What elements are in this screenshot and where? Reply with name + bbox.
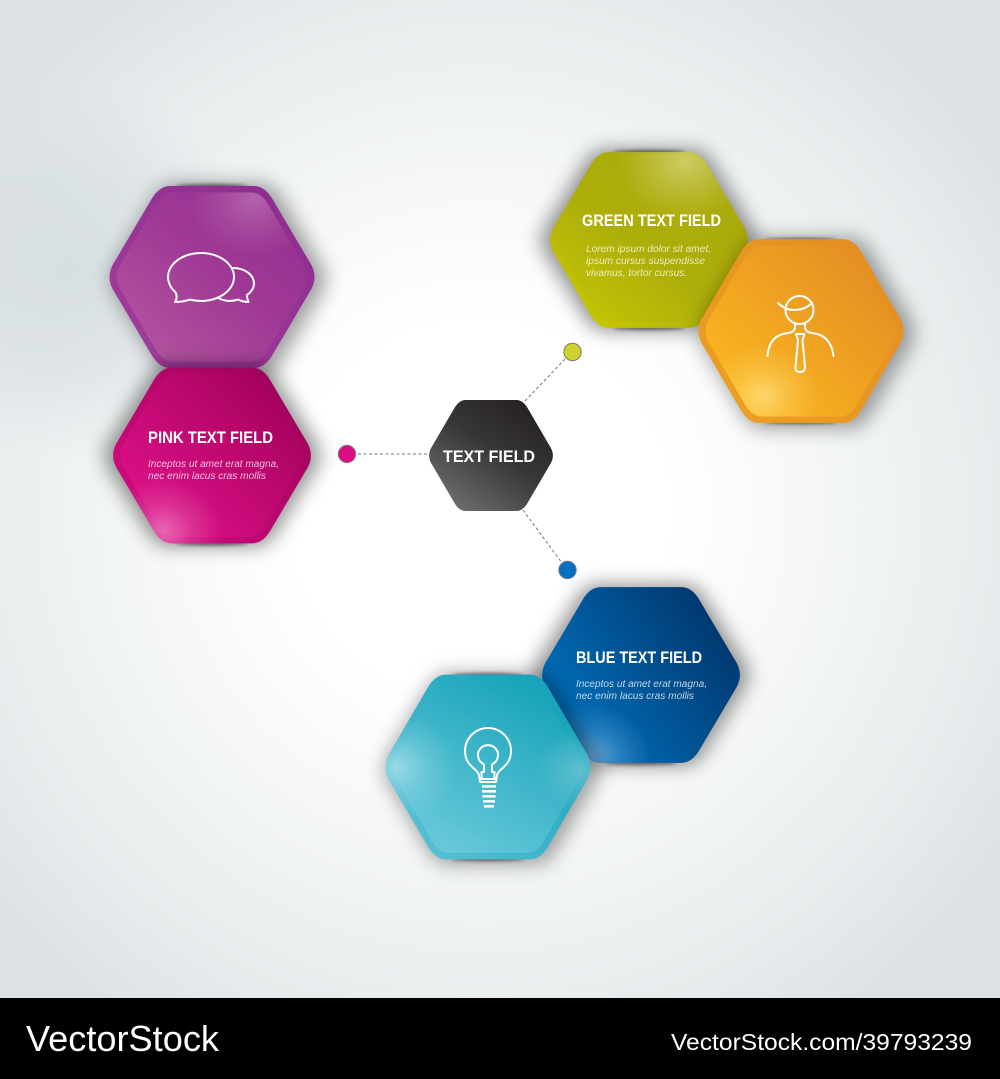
body text: pink: [148, 459, 279, 482]
node: green dot: [564, 343, 581, 361]
connector: green: [525, 358, 566, 401]
body text: green: ipsum cursus suspendisse: [586, 256, 705, 267]
teal hexagon shape: [384, 673, 600, 865]
connector: pink: [358, 453, 429, 455]
icon: chat bubbles: [168, 253, 254, 302]
heading: text field: TEXT FIELD: [443, 448, 535, 466]
node: pink dot: [338, 445, 356, 463]
body text: green: vivamus, tortor cursus.: [586, 268, 687, 279]
body text: blue: [576, 679, 707, 702]
body text: pink: Inceptos ut amet erat magna,: [148, 459, 279, 470]
footer url text: VectorStock.com/39793239: [671, 1029, 972, 1055]
green hexagon shape: [541, 149, 757, 331]
dark hexagon shape: [429, 400, 553, 511]
panel: green hexagon: [541, 149, 757, 331]
body text: green: [586, 244, 711, 279]
pink hexagon shape: [104, 364, 320, 546]
body text: blue: nec enim lacus cras mollis: [576, 691, 694, 702]
orange hexagon shape: [698, 237, 915, 429]
footer: black watermark band: [0, 998, 1000, 1079]
panel: blue hexagon: [533, 584, 749, 766]
footer logo text: VectorStock: [26, 1018, 220, 1059]
body text: pink: nec enim lacus cras mollis: [148, 471, 266, 482]
body text: blue: Inceptos ut amet erat magna,: [576, 679, 707, 690]
panel: central dark hexagon: [429, 400, 553, 511]
panel: purple hexagon with chat icon: [110, 183, 326, 375]
purple hexagon shape: [110, 183, 326, 375]
connector: blue: [523, 510, 562, 563]
icon: person with tie: [768, 296, 834, 372]
node: blue dot: [559, 561, 576, 579]
panel: orange hexagon with person icon: [698, 237, 915, 429]
panel: teal hexagon with light bulb icon: [384, 673, 600, 865]
blue hexagon shape: [533, 584, 749, 766]
body text: green: Lorem ipsum dolor sit amet,: [586, 244, 711, 255]
heading: green text field: GREEN TEXT FIELD: [582, 212, 721, 230]
icon: light bulb: [465, 728, 511, 808]
heading: pink text field: PINK TEXT FIELD: [148, 429, 273, 447]
panel: pink hexagon: [104, 364, 320, 546]
heading: blue text field: BLUE TEXT FIELD: [576, 649, 702, 667]
